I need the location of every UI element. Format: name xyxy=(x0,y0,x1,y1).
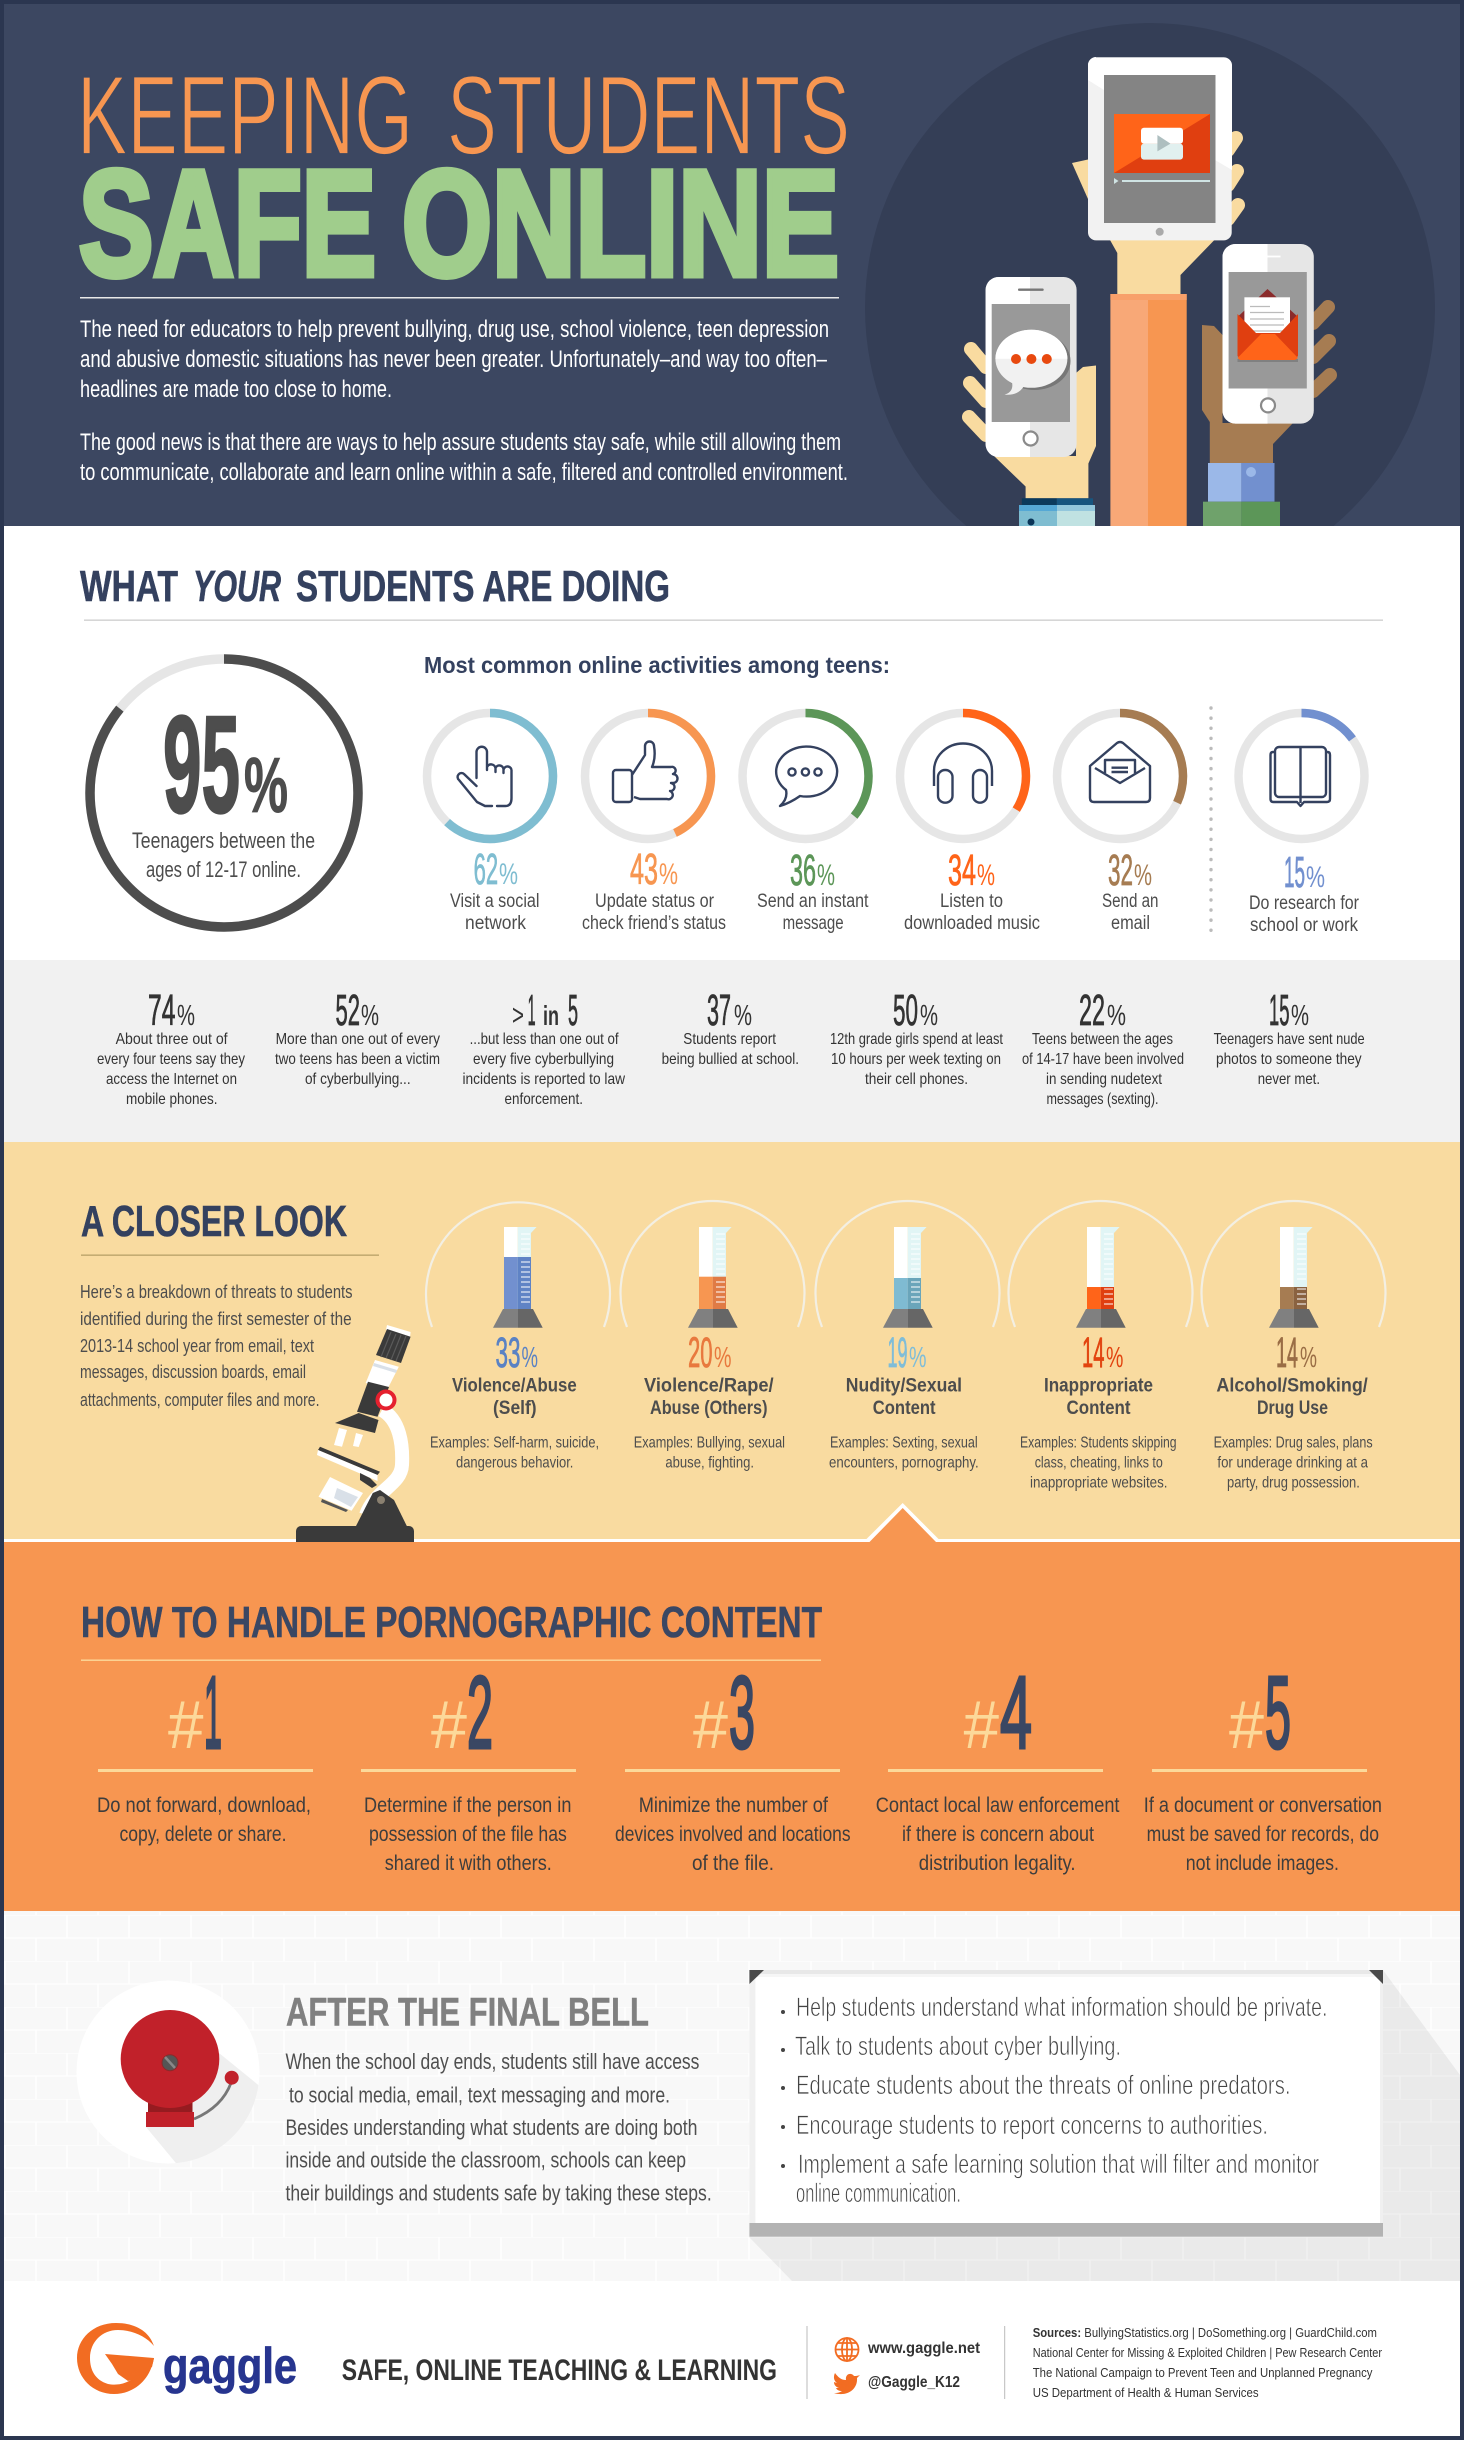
stat: more than 1 in 5: incidents is reported to law xyxy=(462,1071,625,1088)
panel: statistics band xyxy=(4,960,1460,1142)
activity: update status: % xyxy=(659,858,678,891)
activity: downloaded music: 34 xyxy=(948,846,976,895)
activity: update status: 43 xyxy=(630,845,658,894)
stat ring: 95 percent xyxy=(90,659,358,927)
stat: 15 percent: photos to someone they xyxy=(1216,1051,1362,1068)
icon: globe xyxy=(836,2338,858,2361)
activity: social network: 62 xyxy=(474,845,498,894)
step 1: Do not forward, download, xyxy=(97,1794,311,1817)
checklist: Encourage students to report concerns to authorities. xyxy=(796,2110,1268,2140)
heading xyxy=(80,562,670,611)
checklist: Educate students about the threats of online predators. xyxy=(796,2070,1290,2100)
checklist xyxy=(781,1992,1328,2208)
activity: send email xyxy=(1057,713,1183,934)
threat: violence abuse self: % xyxy=(522,1342,538,1374)
icon: pointing hand xyxy=(458,747,512,806)
step 5: If a document or conversation xyxy=(1144,1794,1382,1817)
title: safe online: SAFE xyxy=(79,139,376,307)
intro paragraphs: to communicate, collaborate and learn online within a safe, filtered and controlled environment. xyxy=(80,459,848,486)
threat: alcohol smoking drug use: Examples: Drug sales, plans xyxy=(1214,1435,1373,1452)
description: 2013-14 school year from email, text xyxy=(80,1336,314,1356)
threat: violence rape abuse others: Violence/Rape/ xyxy=(644,1375,774,1397)
contact links xyxy=(834,2338,981,2394)
title: safe online xyxy=(79,139,839,307)
threat: alcohol smoking drug use: party, drug possession. xyxy=(1227,1475,1360,1492)
whiteboard xyxy=(749,1970,1383,2237)
threat: alcohol smoking drug use: Drug Use xyxy=(1257,1397,1328,1419)
icon: microscope xyxy=(296,1325,414,1542)
stat: more than 1 in 5: ...but less than one out of xyxy=(470,1031,619,1048)
threat: inappropriate content: Inappropriate xyxy=(1044,1375,1153,1397)
threat: violence abuse self: 33 xyxy=(496,1329,520,1377)
step 3: # xyxy=(693,1687,728,1763)
activity: research: % xyxy=(1306,861,1325,894)
heading: STUDENTS ARE DOING xyxy=(296,562,670,611)
sources: National Center for Missing & Exploited Children | Pew Research Center xyxy=(1033,2345,1383,2360)
threat: nudity sexual content: Examples: Sexting, sexual xyxy=(830,1435,978,1452)
step 4: if there is concern about xyxy=(902,1823,1094,1846)
activity: instant message: Send an instant xyxy=(757,891,869,912)
step 3 xyxy=(615,1655,851,1875)
stat: 15 percent: Teenagers have sent nude xyxy=(1214,1031,1365,1048)
contact links: www.gaggle.net xyxy=(867,2340,981,2357)
step 3: 3 xyxy=(729,1655,755,1770)
beaker 20 percent xyxy=(688,1227,738,1328)
description: When the school day ends, students still have access xyxy=(286,2049,699,2074)
tagline: SAFE, ONLINE TEACHING & LEARNING xyxy=(342,2354,777,2387)
activity: social network: network xyxy=(465,913,526,934)
stat: 22 percent: % xyxy=(1107,1000,1126,1032)
stat ring: 95 percent: % xyxy=(244,741,288,829)
step 5: 5 xyxy=(1265,1655,1291,1770)
title: keeping students: KEEPING xyxy=(77,53,413,178)
activity: downloaded music: Listen to xyxy=(940,891,1003,912)
icon: book xyxy=(1270,747,1330,806)
stat: 15 percent: 15 xyxy=(1269,986,1290,1035)
activity: instant message: 36 xyxy=(790,846,816,895)
step 2: # xyxy=(431,1687,467,1763)
activity: send email: email xyxy=(1111,913,1150,934)
threat: inappropriate content: Examples: Students skipping xyxy=(1020,1435,1177,1452)
step 1: 1 xyxy=(204,1655,222,1770)
icon: headphones xyxy=(934,744,992,803)
description: identified during the first semester of the xyxy=(80,1309,352,1329)
activity: instant message: % xyxy=(817,859,835,892)
beaker 14 percent brown xyxy=(1269,1227,1319,1328)
checklist: Talk to students about cyber bullying. xyxy=(795,2031,1121,2061)
threat: violence abuse self xyxy=(426,1202,610,1472)
activity: downloaded music xyxy=(900,713,1040,934)
left hand xyxy=(969,349,1096,526)
stat: 74 percent: About three out of xyxy=(116,1031,228,1048)
stat: 50 percent: % xyxy=(920,1000,938,1032)
step 2: 2 xyxy=(467,1655,493,1770)
heading: WHAT xyxy=(80,562,178,611)
step 3: Minimize the number of xyxy=(639,1794,828,1817)
stat: 74 percent: 74 xyxy=(148,986,176,1035)
activity: send email: % xyxy=(1134,859,1152,892)
stat: 50 percent: 50 xyxy=(893,986,918,1035)
activity: update status xyxy=(582,713,726,934)
activity: research: 15 xyxy=(1284,848,1305,897)
sources: The National Campaign to Prevent Teen and Unplanned Pregnancy xyxy=(1033,2365,1373,2380)
tablet xyxy=(1088,57,1232,240)
threat: alcohol smoking drug use: for underage drinking at a xyxy=(1217,1455,1368,1472)
title: keeping students: STUDENTS xyxy=(447,53,850,178)
threat: nudity sexual content: encounters, pornography. xyxy=(829,1455,979,1472)
heading: YOUR xyxy=(193,562,281,611)
step 5: must be saved for records, do xyxy=(1147,1823,1379,1846)
threat: alcohol smoking drug use: Alcohol/Smoking/ xyxy=(1216,1375,1368,1397)
threat: violence abuse self: dangerous behavior. xyxy=(456,1455,573,1472)
stat: 15 percent: % xyxy=(1291,1000,1309,1032)
threat: violence abuse self: Violence/Abuse xyxy=(452,1375,577,1397)
threat: violence rape abuse others: Abuse (Others) xyxy=(650,1397,768,1419)
heading: AFTER THE FINAL BELL xyxy=(286,1991,649,2035)
activity: downloaded music: downloaded music xyxy=(904,913,1040,934)
description xyxy=(286,2049,712,2206)
description xyxy=(80,1282,352,1410)
icon: thumbs up xyxy=(613,742,678,802)
activity: social network: Visit a social xyxy=(450,891,540,912)
stat: 37 percent: being bullied at school. xyxy=(662,1051,799,1068)
stat: 52 percent: 52 xyxy=(336,986,360,1035)
subheading: activities: Most common online activities among teens: xyxy=(424,652,890,678)
intro paragraphs: The need for educators to help prevent bullying, drug use, school violence, teen depression xyxy=(80,316,829,343)
step 3: devices involved and locations xyxy=(615,1823,851,1846)
threat: violence rape abuse others: % xyxy=(714,1342,732,1374)
description: messages, discussion boards, email xyxy=(80,1362,306,1382)
threat: violence rape abuse others: 20 xyxy=(688,1329,713,1377)
threat: inappropriate content xyxy=(1009,1201,1192,1492)
sources xyxy=(1033,2325,1383,2400)
step 4: distribution legality. xyxy=(919,1852,1076,1875)
threat: nudity sexual content: % xyxy=(909,1342,926,1374)
stat: 50 percent: 12th grade girls spend at least xyxy=(830,1031,1003,1048)
step 5: # xyxy=(1229,1687,1264,1763)
icon: speech bubble xyxy=(776,747,837,806)
activity: instant message: message xyxy=(783,913,844,934)
icon: open envelope xyxy=(1090,742,1150,802)
threat: nudity sexual content: Nudity/Sexual xyxy=(846,1375,962,1397)
threat: nudity sexual content: 19 xyxy=(888,1329,908,1377)
activity: social network: % xyxy=(499,858,518,891)
stat: 37 percent: % xyxy=(734,1000,752,1032)
beaker 19 percent xyxy=(883,1227,933,1328)
center hand and sleeve xyxy=(1072,138,1238,526)
activity: research: school or work xyxy=(1250,915,1358,936)
threat: nudity sexual content: Content xyxy=(873,1397,936,1419)
stat: 52 percent xyxy=(275,986,440,1088)
logo: gaggle: gaggle xyxy=(163,2338,297,2394)
panel: header xyxy=(4,4,1460,526)
stat: 22 percent: 22 xyxy=(1079,986,1105,1035)
logo: gaggle xyxy=(77,2323,297,2394)
activity: send email: 32 xyxy=(1108,846,1133,895)
stat: 74 percent: mobile phones. xyxy=(126,1091,218,1108)
intro paragraphs: and abusive domestic situations has never been greater. Unfortunately–and way too often– xyxy=(80,346,828,373)
title: safe online: ONLINE xyxy=(402,139,839,307)
threat: alcohol smoking drug use xyxy=(1202,1201,1385,1492)
threat: inappropriate content: Content xyxy=(1066,1397,1131,1419)
activity: research xyxy=(1238,713,1364,936)
stat: 22 percent: of 14-17 have been involved xyxy=(1022,1051,1184,1068)
step 2: shared it with others. xyxy=(385,1852,552,1875)
stat: more than 1 in 5: in xyxy=(543,1000,559,1031)
icon: twitter bird xyxy=(834,2373,860,2394)
stat: 74 percent: % xyxy=(177,1000,195,1032)
stat: 22 percent: messages (sexting). xyxy=(1046,1091,1158,1108)
threat: violence abuse self: (Self) xyxy=(493,1397,537,1419)
stat: more than 1 in 5: 1 xyxy=(528,986,536,1035)
stat ring: 95 percent: ages of 12-17 online. xyxy=(146,857,301,882)
panel: footer xyxy=(4,2281,1460,2436)
beaker 14 percent xyxy=(1076,1227,1126,1328)
stat: 15 percent xyxy=(1214,986,1365,1088)
left phone with chat bubble xyxy=(986,277,1077,457)
intro paragraphs: The good news is that there are ways to help assure students stay safe, while still allowing them xyxy=(80,429,841,456)
stat: 50 percent: their cell phones. xyxy=(865,1071,968,1088)
stat: more than 1 in 5: > xyxy=(512,999,524,1032)
illustration: hands holding devices xyxy=(865,23,1435,526)
panel: how to handle pornographic content xyxy=(4,1503,1460,1911)
intro paragraphs xyxy=(80,316,848,486)
stat ring: 95 percent: 95 xyxy=(163,688,240,842)
stat: 52 percent: % xyxy=(361,1000,379,1032)
activity: instant message xyxy=(742,713,869,934)
stat: more than 1 in 5: every five cyberbullying xyxy=(473,1051,614,1068)
threat: inappropriate content: 14 xyxy=(1082,1329,1104,1377)
step 1: # xyxy=(168,1687,204,1763)
heading: HOW TO HANDLE PORNOGRAPHIC CONTENT xyxy=(81,1598,822,1647)
description: to social media, email, text messaging and more. xyxy=(289,2083,670,2108)
description: Besides understanding what students are doing both xyxy=(286,2115,698,2140)
description: their buildings and students safe by taking these steps. xyxy=(286,2181,712,2206)
step 4 xyxy=(876,1655,1120,1875)
stat: 37 percent: 37 xyxy=(707,986,731,1035)
right hand xyxy=(1202,307,1330,526)
stat: more than 1 in 5: 5 xyxy=(568,986,578,1035)
stat: 22 percent: Teens between the ages xyxy=(1032,1031,1173,1048)
panel: a closer look xyxy=(4,1142,1460,1542)
stat: 50 percent: 10 hours per week texting on xyxy=(831,1051,1001,1068)
stat: 52 percent: two teens has been a victim xyxy=(275,1051,440,1068)
threat: violence rape abuse others: Examples: Bullying, sexual xyxy=(634,1435,785,1452)
stat ring: 95 percent: Teenagers between the xyxy=(132,828,315,853)
activity: update status: Update status or xyxy=(595,891,715,912)
step 1: copy, delete or share. xyxy=(120,1823,286,1846)
title: keeping students xyxy=(77,53,850,178)
stat: 74 percent: every four teens say they xyxy=(97,1051,245,1068)
activity: social network xyxy=(427,713,553,934)
activity: downloaded music: % xyxy=(977,859,995,892)
stat: 74 percent xyxy=(97,986,245,1108)
panel: what your students are doing xyxy=(4,526,1460,960)
stat: more than 1 in 5: enforcement. xyxy=(504,1091,583,1108)
stat: 15 percent: never met. xyxy=(1258,1071,1320,1088)
stat: 22 percent xyxy=(1022,986,1184,1108)
panel: after the final bell xyxy=(4,1911,1460,2281)
threat: violence abuse self: Examples: Self-harm, suicide, xyxy=(430,1435,599,1452)
step 4: # xyxy=(964,1687,999,1763)
description: Here’s a breakdown of threats to students xyxy=(80,1282,352,1302)
sources: US Department of Health & Human Services xyxy=(1033,2385,1259,2400)
threat: nudity sexual content xyxy=(815,1201,1000,1472)
contact links: @Gaggle_K12 xyxy=(868,2374,960,2391)
step 4: Contact local law enforcement xyxy=(876,1794,1120,1817)
step 2: Determine if the person in xyxy=(364,1794,571,1817)
stat: 37 percent xyxy=(662,986,799,1068)
threat: violence rape abuse others: abuse, fighting. xyxy=(665,1455,754,1472)
step 4: 4 xyxy=(1000,1655,1032,1770)
sources: Sources: BullyingStatistics.org | DoSomething.org | GuardChild.com xyxy=(1033,2325,1377,2340)
step 3: of the file. xyxy=(692,1852,774,1875)
activity: research: Do research for xyxy=(1249,893,1360,914)
stat: 50 percent xyxy=(830,986,1003,1088)
stat: 37 percent: Students report xyxy=(683,1031,776,1048)
heading: A CLOSER LOOK xyxy=(81,1197,347,1246)
threat: inappropriate content: inappropriate websites. xyxy=(1030,1475,1168,1492)
threat: alcohol smoking drug use: % xyxy=(1300,1342,1317,1374)
stat: 22 percent: in sending nudetext xyxy=(1046,1071,1162,1088)
description: inside and outside the classroom, schools can keep xyxy=(286,2148,686,2173)
right phone with envelope xyxy=(1222,244,1314,424)
intro paragraphs: headlines are made too close to home. xyxy=(80,376,392,403)
step 2 xyxy=(361,1655,576,1875)
description: attachments, computer files and more. xyxy=(80,1390,320,1410)
arrow: pointer notch xyxy=(866,1503,939,1542)
stat: 52 percent: of cyberbullying... xyxy=(305,1071,411,1088)
threat: inappropriate content: class, cheating, links to xyxy=(1035,1455,1163,1472)
stat: more than 1 in 5 xyxy=(462,986,625,1108)
icon: school bell xyxy=(120,2010,258,2163)
threat: alcohol smoking drug use: 14 xyxy=(1276,1329,1298,1377)
step 1 xyxy=(97,1655,313,1846)
threat: violence rape abuse others xyxy=(620,1201,804,1472)
step 2: possession of the file has xyxy=(369,1823,567,1846)
activity: send email: Send an xyxy=(1102,891,1158,912)
step 5: not include images. xyxy=(1186,1852,1339,1875)
activity: update status: check friend’s status xyxy=(582,913,726,934)
checklist: online communication. xyxy=(796,2178,961,2208)
stat: 74 percent: access the Internet on xyxy=(106,1071,237,1088)
step 5 xyxy=(1144,1655,1382,1875)
threat: inappropriate content: % xyxy=(1106,1342,1123,1374)
stat: 52 percent: More than one out of every xyxy=(276,1031,440,1048)
beaker 33 percent xyxy=(493,1227,543,1328)
